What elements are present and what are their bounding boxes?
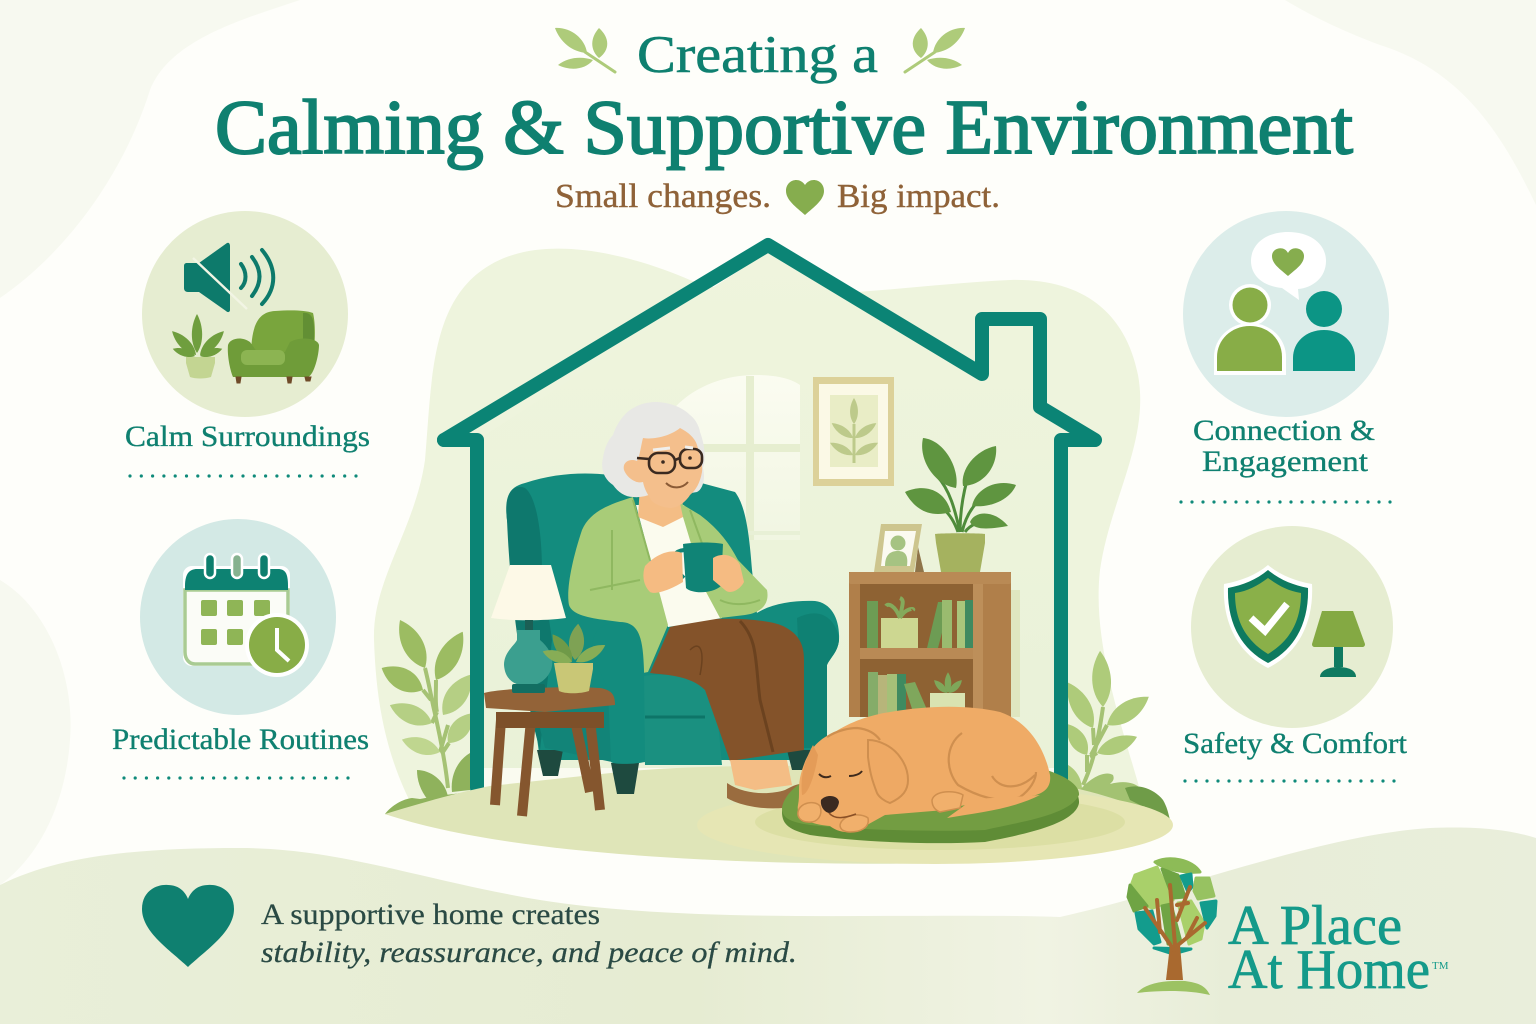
shoes xyxy=(727,783,804,808)
icon: potted plant xyxy=(168,314,228,378)
cardigan creases xyxy=(590,500,760,604)
face xyxy=(624,428,702,508)
photo frame xyxy=(874,524,924,572)
icon: left laurel leaves xyxy=(555,28,615,72)
cardigan right xyxy=(680,503,768,618)
shelf plant xyxy=(905,438,1016,572)
icon: calendar with clock xyxy=(183,554,309,677)
subtitle: small changes: Small changes. xyxy=(555,178,771,215)
logo wordmark line 2: At Home xyxy=(1228,939,1430,1001)
left garden plant xyxy=(377,615,480,818)
sleeping dog xyxy=(798,707,1050,832)
icon: muted speaker xyxy=(184,243,273,312)
small table plant xyxy=(541,623,608,693)
dog bed xyxy=(782,768,1079,843)
background blob xyxy=(374,249,1140,830)
dotted divider xyxy=(124,776,349,780)
heading: main title: Calming & Supportive Environment xyxy=(215,84,1353,170)
panel: safety and comfort xyxy=(1183,526,1408,781)
mouth xyxy=(829,813,856,818)
icon circle xyxy=(1183,211,1389,417)
blouse xyxy=(636,505,722,627)
label: Safety & Comfort xyxy=(1183,727,1408,760)
tail xyxy=(947,795,1040,818)
hair xyxy=(602,402,705,497)
label: Connection & xyxy=(1193,414,1375,447)
icon: shield with check xyxy=(1224,565,1312,668)
panel: closing message xyxy=(142,885,797,969)
chair front arm xyxy=(593,622,645,764)
text: second line: stability, reassurance, and peace of mind. xyxy=(261,936,797,969)
head and haunch lines xyxy=(827,728,1036,800)
panel: house scene xyxy=(374,245,1173,864)
ear xyxy=(868,740,908,803)
trademark: TM xyxy=(1432,960,1449,972)
neck xyxy=(638,485,683,527)
seated woman xyxy=(568,402,804,808)
panel: predictable routines xyxy=(112,519,369,778)
icon circle xyxy=(142,211,348,417)
dotted divider xyxy=(1185,779,1395,783)
logo: A Place At Home xyxy=(1128,859,1449,1001)
trousers xyxy=(650,619,804,761)
left hand xyxy=(643,551,683,593)
floor xyxy=(385,766,1172,864)
rug xyxy=(697,786,1173,864)
house outline xyxy=(444,245,1095,790)
right hand xyxy=(713,555,744,592)
table lamp xyxy=(491,565,566,693)
logo wordmark line 1: A Place xyxy=(1228,895,1402,957)
text: first line: A supportive home creates xyxy=(261,898,600,931)
eyes and smile xyxy=(653,447,693,487)
icon: armchair xyxy=(228,310,319,383)
dotted divider xyxy=(1181,500,1391,504)
window xyxy=(660,375,800,540)
ankles xyxy=(730,760,792,790)
back ear xyxy=(802,745,818,795)
mug xyxy=(683,542,723,592)
right garden plant xyxy=(1060,650,1170,820)
glasses xyxy=(637,449,702,473)
room interior xyxy=(477,252,1061,790)
icon: subtitle heart xyxy=(786,180,824,215)
label: Predictable Routines xyxy=(112,723,369,756)
icon: right laurel leaves xyxy=(905,28,965,72)
nose xyxy=(821,796,839,813)
icon: teal heart xyxy=(142,885,234,967)
icon: lamp xyxy=(1312,611,1365,677)
icon: two people xyxy=(1214,284,1355,375)
skirting xyxy=(484,768,1054,794)
panel: connection and engagement xyxy=(1181,211,1391,502)
dotted divider xyxy=(130,474,357,478)
wall frame picture xyxy=(813,377,894,486)
subtitle: big impact: Big impact. xyxy=(837,178,1000,215)
paws xyxy=(932,792,963,812)
bookcase xyxy=(849,572,1020,717)
heading: Creating a: Creating a xyxy=(637,26,878,84)
panel: calm surroundings xyxy=(125,211,370,476)
closed eyes xyxy=(819,771,862,777)
cardigan left xyxy=(568,497,668,673)
icon circle xyxy=(1191,526,1393,728)
logo tree xyxy=(1128,859,1216,995)
label: Calm Surroundings xyxy=(125,420,370,453)
label second line: Engagement xyxy=(1202,445,1369,478)
title block xyxy=(215,26,1353,215)
armchair xyxy=(506,474,839,794)
icon circle xyxy=(140,519,336,715)
body xyxy=(798,707,1050,832)
icon: speech bubble with heart xyxy=(1251,232,1326,300)
side table xyxy=(484,687,615,816)
